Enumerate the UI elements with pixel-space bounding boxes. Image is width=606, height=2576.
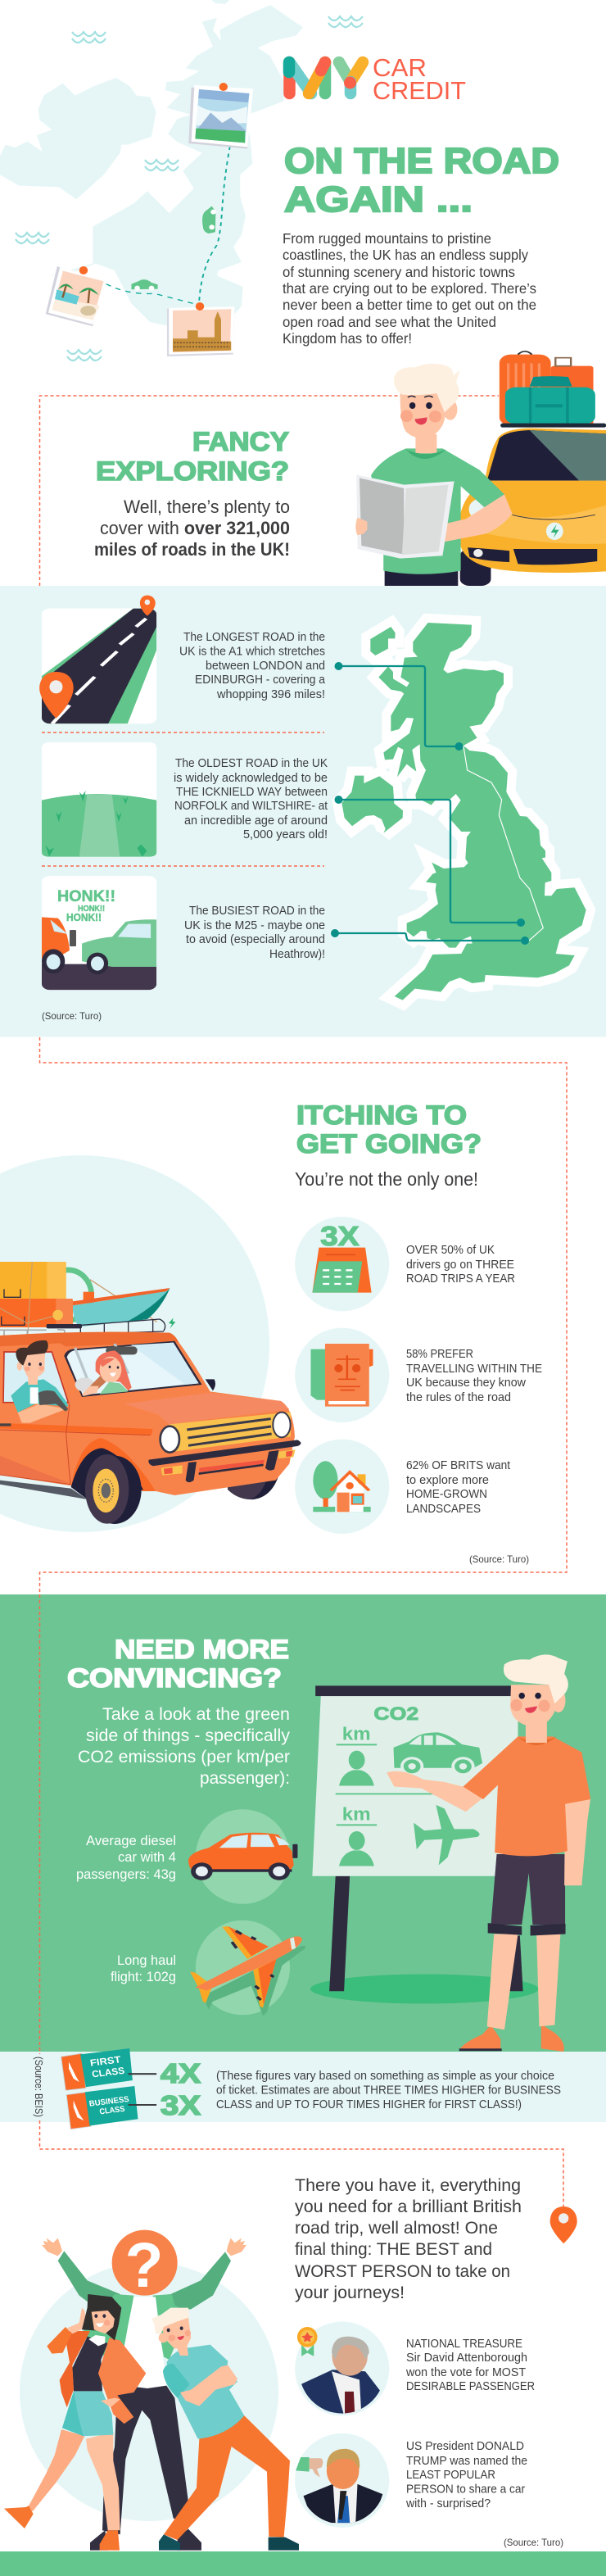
fact: oldest: THE ICKNIELD WAY between [176, 786, 328, 799]
stat text: rules of the road: the rules of the road [406, 1391, 511, 1404]
text: Attenborough: Sir David Attenborough [406, 2352, 527, 2365]
text: miles of roads: miles of roads in the UK! [94, 539, 290, 560]
dashed route line [39, 396, 567, 2206]
grille and lights [170, 1412, 291, 1452]
text: closing paragraph: WORST PERSON to take on [295, 2261, 510, 2281]
intro text: coastlines, the UK has an endless supply [283, 247, 528, 263]
stat text: landscapes: HOME-GROWN [406, 1488, 487, 1501]
card: oldest road [42, 742, 156, 857]
text: closing paragraph: your journeys! [295, 2283, 405, 2302]
wave decorations [16, 16, 363, 361]
fact: oldest: NORFOLK and WILTSHIRE- at [174, 800, 328, 813]
text: Trump: with - surprised? [405, 2497, 491, 2510]
map connector lines [331, 662, 529, 945]
business class ticket [66, 2086, 138, 2129]
heading: fancy exploring: EXPLORING? [96, 456, 289, 486]
stat text: road trips: OVER 50% of UK [406, 1244, 495, 1257]
first class ticket: FIRST [89, 2054, 122, 2068]
fact: oldest: The OLDEST ROAD in the UK [175, 757, 328, 770]
icon: house and tree [295, 1440, 389, 1534]
text: closing paragraph: road trip, well almost! One [295, 2218, 498, 2238]
stat text: landscapes: to explore more [406, 1474, 489, 1487]
fact: oldest [174, 757, 328, 841]
car body [0, 1333, 295, 1495]
text: ticket note [216, 2070, 561, 2111]
text: diesel car: car with 4 [118, 1850, 176, 1865]
logo wordmark: CREDIT [373, 76, 466, 105]
text: CO2 intro: passenger): [200, 1769, 290, 1788]
figure with question mark head [42, 2230, 246, 2551]
fact: busiest: UK is the M25 - maybe one [184, 919, 325, 932]
man [355, 364, 512, 586]
source: Turo: (Source: Turo) [469, 1553, 529, 1565]
fact: busiest: The BUSIEST ROAD in the [189, 905, 325, 918]
figure with question mark head: ? [125, 2231, 163, 2301]
section band: CO2 [0, 1594, 606, 2052]
illustration: three people [4, 2230, 299, 2551]
photo: London [167, 302, 235, 356]
icon: calendar 3X [295, 1217, 389, 1311]
text: Attenborough: won the vote for MOST [405, 2366, 526, 2379]
stat text: rules of the road: TRAVELLING WITHIN THE [406, 1363, 542, 1376]
fact: oldest: is widely acknowledged to be [174, 772, 328, 785]
UK road map [341, 623, 586, 1000]
logo [289, 53, 466, 105]
honk text: HONK!! [66, 912, 102, 923]
woman driver [82, 1350, 132, 1396]
text: diesel car [76, 1834, 176, 1882]
background map of the UK [0, 0, 303, 333]
fact: longest: EDINBURGH - covering a [195, 673, 326, 687]
source: BEIS: (Source: BEIS) [33, 2057, 44, 2117]
text: CO2 intro [78, 1705, 290, 1788]
text: Trump: TRUMP was named the [406, 2455, 527, 2468]
intro text: Kingdom has to offer! [283, 330, 412, 347]
heading: need more convincing: CONVINCING? [67, 1663, 282, 1693]
intro text: From rugged mountains to pristine [283, 230, 491, 247]
business class ticket: CLASS [99, 2104, 125, 2116]
heading: fancy exploring [96, 427, 289, 486]
whiteboard: km [342, 1804, 371, 1825]
first class ticket [61, 2048, 133, 2090]
ground shadow [310, 1975, 538, 2003]
big circle behind car [0, 1155, 269, 1532]
stat text: rules of the road: 58% PREFER [406, 1348, 473, 1361]
footer bar [0, 2551, 606, 2576]
illustration: CO2 section artwork [188, 1654, 590, 2052]
fact: longest: The LONGEST ROAD in the [183, 631, 325, 644]
text: closing paragraph [295, 2175, 522, 2302]
honk text: HONK!! [78, 905, 105, 914]
presenter [387, 1654, 590, 2052]
multiplier 4X: 4X [161, 2058, 201, 2088]
map pin [550, 2206, 577, 2243]
fact: busiest: to avoid (especially around [186, 933, 325, 946]
big circle behind people [20, 2262, 278, 2521]
text: Attenborough: DESIRABLE PASSENGER [406, 2380, 535, 2393]
fact: busiest: Heathrow)! [269, 948, 325, 961]
stat text: road trips: ROAD TRIPS A YEAR [406, 1272, 515, 1286]
fact: longest [179, 631, 326, 701]
illustration: orange car [0, 1332, 301, 1524]
icon: calendar 3X: 3X [320, 1221, 359, 1251]
text: Attenborough [405, 2338, 535, 2393]
multiplier 3X: 3X [161, 2090, 201, 2120]
portrait: Trump [295, 2433, 389, 2528]
car [460, 429, 606, 586]
photo: beach [46, 266, 106, 326]
card: busiest road [42, 876, 156, 990]
text: diesel car: passengers: 43g [76, 1867, 176, 1882]
text: miles of roads: Well, there’s plenty to [124, 497, 290, 517]
first class ticket: CLASS [91, 2066, 125, 2079]
fact: oldest: an incredible age of around [184, 814, 328, 828]
fact: longest: between LONDON and [206, 660, 325, 673]
whiteboard [312, 1685, 523, 1991]
portrait: Attenborough [295, 2321, 389, 2415]
text: Trump: US President DONALD [406, 2440, 524, 2453]
subheading: You’re not the only one! [295, 1168, 478, 1190]
fact: oldest: 5,000 years old! [243, 828, 328, 841]
rear wheel [227, 1472, 280, 1499]
fact dividers [42, 732, 324, 866]
whiteboard: km [342, 1724, 371, 1744]
section band: ticket class [0, 2052, 606, 2122]
title: ON THE ROAD [284, 141, 559, 181]
card: longest road [39, 596, 156, 723]
intro text: open road and see what the United [283, 314, 496, 330]
fact: longest: whopping 396 miles! [216, 688, 325, 701]
fact: longest: UK is the A1 which stretches [179, 646, 325, 659]
photo: mountains [188, 83, 253, 149]
fact: busiest [184, 905, 325, 961]
heading: need more convincing [67, 1635, 289, 1693]
stat text: rules of the road: UK because they know [406, 1376, 527, 1390]
stat text: road trips [406, 1244, 515, 1286]
text: CO2 intro: side of things - specifically [86, 1726, 290, 1745]
honk text [57, 888, 115, 923]
stat text: landscapes [406, 1459, 510, 1516]
section band: road facts [0, 586, 606, 1037]
text: Trump: PERSON to share a car [406, 2483, 525, 2496]
source: Turo: (Source: Turo) [504, 2537, 563, 2548]
woman [4, 2294, 146, 2551]
heading: itching to get going: GET GOING? [296, 1129, 482, 1159]
tickets with multipliers [61, 2048, 156, 2129]
luggage on roof [500, 351, 606, 428]
heading: itching to get going [296, 1100, 482, 1159]
text: long haul flight: flight: 102g [111, 1970, 176, 1984]
stat text: road trips: drivers go on THREE [406, 1259, 514, 1272]
business class ticket: BUSINESS [88, 2095, 129, 2109]
honk text: HONK!! [57, 888, 115, 905]
text: diesel car: Average diesel [86, 1834, 176, 1848]
text: closing paragraph: final thing: THE BEST and [295, 2239, 492, 2259]
heading: fancy exploring: FANCY [192, 427, 289, 456]
text: closing paragraph: you need for a brilliant British [295, 2197, 522, 2216]
title [284, 141, 559, 220]
icon: orange plane [190, 1921, 305, 2016]
text: ticket note: CLASS and UP TO FOUR TIMES HIGHER for FIRST CLASS!) [216, 2098, 522, 2111]
title: AGAIN ... [284, 179, 473, 220]
text: miles of roads [94, 497, 290, 560]
man passenger [11, 1340, 68, 1423]
text: long haul flight [111, 1953, 176, 1984]
stat text: landscapes: 62% OF BRITS want [406, 1459, 510, 1472]
stat text: landscapes: LANDSCAPES [406, 1503, 481, 1516]
logo wordmark [373, 53, 466, 105]
text: miles of roads: cover with over 321,000 [100, 518, 290, 538]
roof luggage and boat [0, 1262, 175, 1344]
whiteboard: CO2 [373, 1704, 418, 1724]
text: long haul flight: Long haul [117, 1953, 176, 1968]
travel route with photos [46, 83, 253, 356]
boy [152, 2308, 299, 2551]
stat text: rules of the road [406, 1348, 542, 1404]
portraits [295, 2321, 389, 2528]
text: CO2 intro: CO2 emissions (per km/per [78, 1748, 290, 1766]
source: Turo: (Source: Turo) [42, 1010, 102, 1022]
heading: need more convincing: NEED MORE [115, 1635, 289, 1664]
text: CO2 intro: Take a look at the green [102, 1705, 290, 1724]
text: Attenborough: NATIONAL TREASURE [406, 2338, 522, 2351]
intro text: that are crying out to be explored. There’s [283, 280, 536, 297]
green car on lower route [131, 279, 158, 291]
text: Trump [405, 2440, 527, 2510]
text: Trump: LEAST POPULAR [406, 2469, 495, 2482]
text: ticket note: (These figures vary based on something as simple as your choice [216, 2070, 554, 2083]
intro text [283, 230, 536, 347]
icon: orange car [188, 1809, 297, 1904]
intro text: of stunning scenery and historic towns [283, 264, 515, 280]
front wheel [71, 1448, 143, 1499]
green car on route [202, 206, 216, 234]
intro text: never been a better time to get out on the [283, 297, 536, 313]
windows [64, 1341, 202, 1397]
heading: itching to get going: ITCHING TO [296, 1100, 467, 1130]
text: closing paragraph: There you have it, everything [295, 2175, 521, 2195]
illustration: man with map and car [355, 351, 606, 586]
logo wordmark: CAR [373, 53, 427, 82]
text: ticket note: of ticket. Estimates are about THREE TIMES HIGHER for BUSINESS [216, 2084, 561, 2098]
icon: law book [295, 1328, 389, 1422]
